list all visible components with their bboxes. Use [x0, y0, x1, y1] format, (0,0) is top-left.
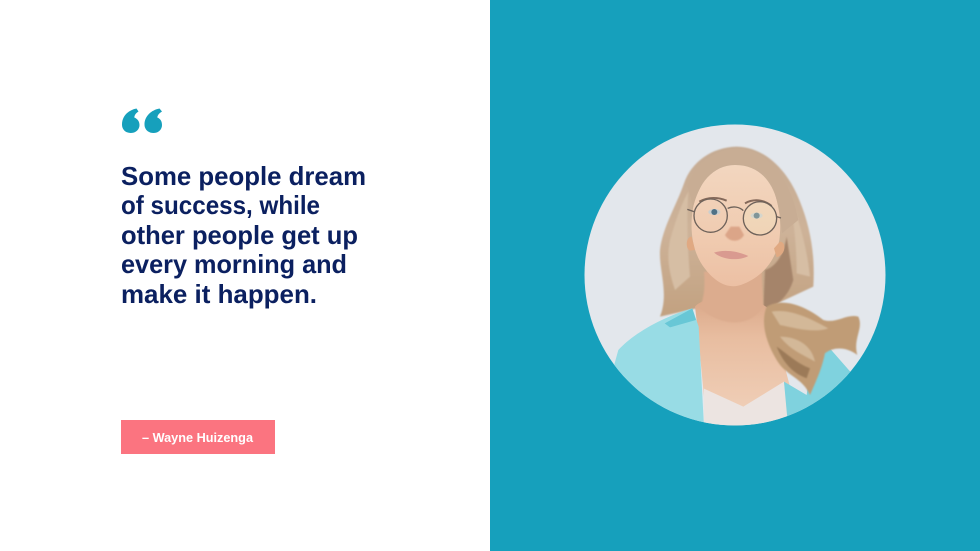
shirt left	[610, 308, 704, 427]
quote text: every morning and	[121, 249, 347, 279]
nose shadow	[725, 227, 744, 241]
attribution tag	[121, 420, 275, 454]
quote text	[121, 161, 366, 309]
hair back	[660, 147, 814, 317]
brows	[699, 198, 772, 206]
quote text: other people get up	[121, 220, 358, 250]
quote text: make it happen.	[121, 279, 317, 309]
hair fringe	[694, 184, 798, 224]
shirt right	[784, 347, 852, 418]
neck	[700, 272, 763, 322]
chest	[695, 302, 790, 406]
eyes	[708, 209, 763, 219]
panel: white quote side	[0, 0, 490, 551]
portrait photo in circle	[580, 120, 890, 430]
quote text: of success, while	[121, 190, 320, 220]
attribution tag: – Wayne Huizenga	[142, 430, 254, 445]
ears	[687, 237, 784, 257]
glasses	[687, 199, 781, 235]
face	[692, 165, 780, 286]
top	[704, 382, 788, 426]
lips	[714, 251, 748, 259]
quote text: Some people dream	[121, 161, 366, 191]
panel: teal portrait side	[490, 0, 980, 551]
curled hair over shirt	[764, 303, 860, 395]
icon: opening quotation mark	[122, 108, 162, 133]
